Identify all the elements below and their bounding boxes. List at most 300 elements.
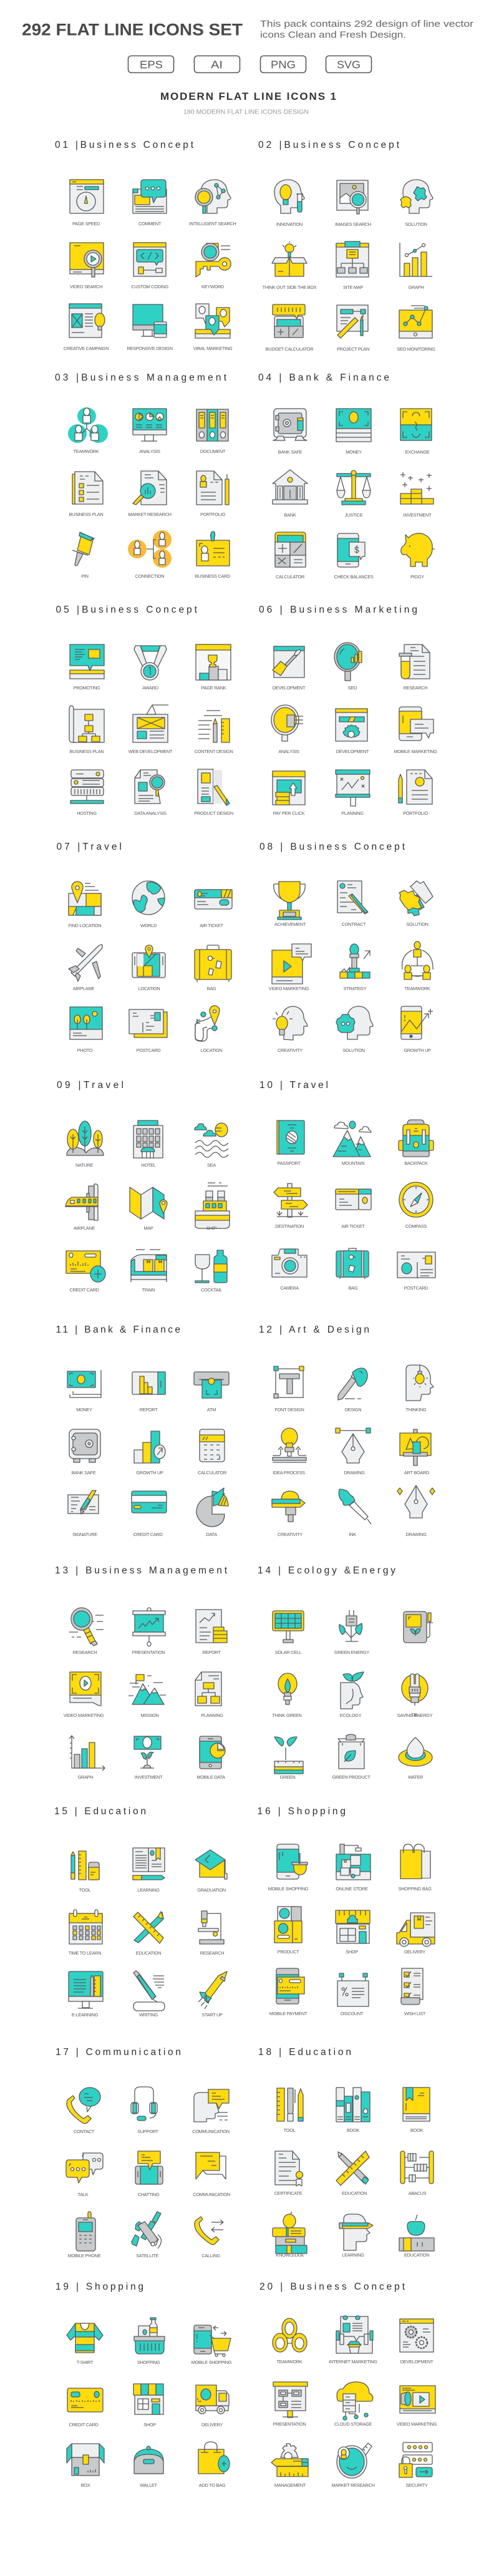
icon: web development	[133, 705, 168, 742]
label: OIL	[411, 1712, 419, 1718]
icon: content design	[198, 711, 230, 742]
icon: teamwork	[402, 941, 433, 979]
label: MOBILE MARKETING	[394, 749, 437, 754]
icon: development	[400, 2319, 434, 2352]
icon: page speed	[70, 180, 104, 213]
label: CONTRACT	[342, 921, 366, 927]
icon: mobile phone	[76, 2212, 95, 2251]
icon: postcard	[397, 1252, 435, 1278]
icon: ship	[195, 1183, 230, 1228]
icon: hosting	[70, 770, 104, 804]
label: TRAIN	[142, 1287, 155, 1293]
icon: justice	[337, 470, 371, 505]
label: TOOL	[79, 1887, 91, 1893]
icon: investment	[134, 1736, 161, 1768]
label: ATM	[207, 1407, 216, 1412]
icon: mobile payment	[276, 1968, 304, 2004]
label: IMAGES SEARCH	[335, 221, 371, 227]
label: RESEARCH	[404, 685, 427, 691]
heading 16: 16 | Shopping	[257, 1806, 346, 1817]
icon: think out side the box	[272, 241, 307, 276]
icon: communication	[194, 2089, 229, 2122]
panel: 19 Shopping	[56, 2282, 232, 2488]
label: GREEN ENERGY	[334, 1650, 369, 1655]
label: BACKPACK	[404, 1160, 428, 1166]
label: CREATIVE CAMPAIGN	[64, 346, 109, 351]
label: DEVELOPMENT	[336, 749, 369, 754]
label: MARKET RESEARCH	[128, 512, 172, 517]
label: SHOPPING BAG	[398, 1886, 432, 1892]
icon: calling	[195, 2217, 223, 2245]
label: DATA ANALYSIS	[134, 810, 167, 816]
icon: mountain	[333, 1121, 371, 1157]
icon: video marketing	[70, 1672, 101, 1706]
icon: mission	[128, 1674, 166, 1704]
icon: online store	[336, 1844, 371, 1880]
label: E-LEARNING	[72, 2012, 99, 2018]
icon: ink	[339, 1489, 371, 1524]
label: SHOPPING	[137, 2360, 160, 2365]
label: MOBILE PHONE	[68, 2253, 101, 2258]
label: CALLING	[201, 2253, 220, 2258]
sub caption: 180 MODERN FLAT LINE ICONS DESIGN	[183, 109, 309, 116]
icon: communication	[196, 2152, 226, 2179]
label: ABACUS	[409, 2190, 427, 2196]
icon: achievement	[274, 882, 305, 920]
label: CAMERA	[280, 1285, 299, 1291]
panel: 09 Travel	[57, 1080, 230, 1293]
icon: contact	[67, 2088, 100, 2124]
icon: innovation	[274, 180, 304, 213]
icon: shop	[133, 2384, 163, 2414]
label: TEAMWORK	[404, 986, 430, 991]
label: REPORT	[140, 1407, 158, 1412]
label: AIR TICKET	[200, 923, 224, 928]
heading 09: 09 |Travel	[57, 1080, 124, 1091]
label: EDUCATION	[342, 2190, 367, 2196]
icon: mobile shopping	[194, 2325, 231, 2356]
icon: development	[273, 646, 304, 678]
icon: nature	[67, 1121, 104, 1155]
panel: 01 Business Concept	[55, 140, 236, 351]
icon: money	[67, 1370, 101, 1397]
icon: pay per click	[273, 771, 305, 805]
icon: analysis	[133, 409, 167, 441]
icon: calculator	[200, 1429, 225, 1462]
icon: market research	[133, 471, 167, 505]
label: WALLET	[140, 2482, 158, 2488]
label: T-SHIRT	[77, 2360, 94, 2365]
label: INTELLIGENT SEARCH	[190, 221, 236, 226]
icon: bank	[273, 470, 308, 504]
label: PORTFOLIO	[200, 512, 225, 517]
icon: abacus	[400, 2151, 434, 2184]
header	[22, 19, 473, 116]
icon: support	[131, 2087, 157, 2121]
label: BUDGET CALCULATOR	[266, 346, 313, 352]
label: THINK OUT SIDE THE BOX	[263, 284, 317, 290]
icon: viral marketing	[195, 304, 230, 338]
label: SAVING ENERGY	[397, 1713, 433, 1718]
label: PIGGY	[410, 574, 424, 580]
label: DELIVERY	[404, 1949, 425, 1955]
label: ECOLOGY	[340, 1713, 362, 1718]
icon: project plan	[337, 305, 368, 338]
icon: check balances	[337, 533, 365, 567]
icon: thinking	[406, 1365, 434, 1401]
label: VIDEO MARKETING	[64, 1713, 104, 1718]
title: 292 FLAT LINE ICONS SET	[22, 20, 243, 39]
icon: design	[338, 1368, 367, 1400]
icon: market research	[337, 2443, 372, 2478]
label: CUSTOM CODING	[131, 284, 168, 289]
label: VIDEO MARKETING	[397, 2421, 437, 2427]
label: VIDEO MARKETING	[269, 986, 309, 991]
icon: certificate	[275, 2151, 303, 2186]
label: AWARD	[142, 685, 158, 691]
label: INK	[349, 1532, 356, 1537]
icon: solar cell	[273, 1611, 304, 1643]
label: THINK GREEN	[272, 1713, 302, 1718]
icon: idea process	[273, 1428, 306, 1462]
icon: t-shirt	[67, 2323, 103, 2353]
label: VIDEO SEARCH	[70, 284, 102, 289]
label: CHECK BALANCES	[334, 574, 374, 580]
label: DATA	[206, 1532, 217, 1537]
icon: creative campaign	[69, 304, 105, 338]
icon: creativity	[272, 1491, 305, 1522]
icon: money	[336, 409, 371, 442]
heading 11: 11 | Bank & Finance	[56, 1324, 180, 1335]
label: HOSTING	[77, 810, 97, 816]
label: COMMUNICATION	[193, 2192, 230, 2197]
heading 18: 18 | Education	[258, 2047, 351, 2058]
icon: report	[196, 1610, 227, 1643]
icon: bag	[336, 1248, 369, 1279]
label: CLOUD STORAGE	[334, 2421, 372, 2427]
label: GRAPH	[409, 284, 424, 290]
format badge: PNG: PNG	[271, 59, 296, 71]
icon: graduation	[195, 1850, 227, 1879]
icon: tool	[277, 2088, 303, 2121]
icon: passport	[277, 1120, 304, 1154]
label: STRATEGY	[344, 986, 367, 991]
icon: presentation	[133, 1608, 165, 1646]
icon: calculator	[275, 532, 306, 567]
label: SEO MONITORING	[397, 346, 435, 352]
label: MONEY	[76, 1407, 92, 1412]
icon: solution	[400, 180, 433, 213]
label: MARKET RESEARCH	[331, 2482, 375, 2488]
icon: piggy	[401, 533, 435, 566]
label: PAGE SPEED	[72, 221, 100, 226]
label: ADD TO BAG	[199, 2482, 226, 2488]
icon: atm	[194, 1372, 229, 1398]
label: PASSPORT	[277, 1160, 301, 1166]
label: REPORT	[203, 1650, 221, 1655]
label: GROWTH UP	[404, 1047, 431, 1053]
icon: bag	[195, 945, 231, 982]
icon: destination	[274, 1184, 308, 1217]
icon: education	[133, 1912, 163, 1943]
panel: 10 Travel	[259, 1080, 435, 1291]
icon: creativity	[273, 1006, 308, 1040]
icon: research	[399, 644, 430, 679]
panel: 20 Business Concept	[259, 2282, 437, 2488]
icon: discount	[337, 1973, 369, 2006]
icon: education	[336, 2151, 369, 2185]
label: WRITING	[139, 2012, 158, 2018]
icon: think green	[278, 1673, 297, 1704]
label: ART BOARD	[404, 1470, 429, 1475]
label: SOLUTION	[406, 921, 429, 927]
label: MOBILE DATA	[196, 1774, 225, 1780]
icon: chatting	[135, 2151, 163, 2184]
label: POSTCARD	[137, 1047, 160, 1053]
label: SOLUTION	[342, 1047, 365, 1053]
label: BAG	[207, 986, 216, 991]
label: MAP	[143, 1225, 153, 1231]
label: GRADUATION	[197, 1887, 226, 1893]
format badge: PNG	[261, 56, 306, 72]
label: MOBILE PAYMENT	[269, 2011, 308, 2016]
icon: check balances: $	[354, 545, 359, 555]
icon: investment	[400, 472, 434, 504]
icon: font design	[274, 1366, 304, 1398]
label: SEO	[348, 685, 357, 691]
heading 13: 13 | Business Management	[55, 1565, 228, 1576]
label: WEB DEVELOPMENT	[128, 749, 173, 754]
icon: credit card	[67, 2388, 103, 2412]
icon: solution	[336, 1006, 373, 1039]
label: CALCULATOR	[198, 1470, 226, 1475]
label: VIRAL MARKETING	[193, 346, 233, 351]
icon: award	[134, 646, 167, 680]
label: LEARNING	[137, 1887, 160, 1893]
label: PRODUCT DESIGN	[194, 810, 233, 816]
icon: compass	[399, 1182, 433, 1217]
icon: sea	[195, 1123, 228, 1157]
icon: graph	[400, 243, 432, 276]
label: BUSINESS PLAN	[70, 749, 104, 754]
icon: portfolio	[196, 471, 229, 505]
label: BAG	[349, 1285, 358, 1291]
icon: business plan	[69, 706, 104, 742]
label: PRODUCT	[278, 1949, 299, 1955]
icon: satellite	[132, 2212, 161, 2248]
icon: world	[132, 881, 165, 915]
label: PIN	[81, 573, 89, 579]
icon: location	[195, 1006, 220, 1041]
label: CREDIT CARD	[69, 1287, 99, 1293]
icon: tool	[71, 1851, 99, 1880]
icon: mobile shopping	[277, 1844, 308, 1879]
panel: 04 Bank & Finance	[258, 372, 435, 580]
icon: bank safe	[69, 1429, 100, 1462]
icon: security	[399, 2442, 432, 2477]
panel: 06 Business Marketing	[259, 605, 437, 816]
icon: learning	[339, 2214, 373, 2250]
label: JUSTICE	[345, 512, 363, 518]
icon: analysis	[271, 705, 303, 741]
label: NATURE	[75, 1162, 93, 1168]
icon: air ticket	[336, 1189, 371, 1210]
label: DEVELOPMENT	[273, 685, 306, 691]
icon: writing	[133, 1971, 165, 2011]
label: WISH LIST	[404, 2011, 426, 2016]
label: MOUNTAIN	[342, 1160, 364, 1166]
label: CREATIVITY	[278, 1532, 303, 1537]
icon: keyword	[196, 243, 231, 277]
label: ANALYSIS	[139, 449, 160, 454]
icon: solution	[399, 881, 433, 916]
label: PRESENTATION	[132, 1650, 165, 1655]
label: DOCUMENT	[200, 449, 226, 454]
icon: growth up	[401, 1006, 433, 1039]
icon: book	[403, 2088, 430, 2121]
label: KNOWLEDGE	[276, 2252, 304, 2258]
label: COMPASS	[405, 1223, 427, 1229]
label: START UP	[201, 2012, 223, 2018]
icon: video marketing	[400, 2386, 435, 2413]
label: INVESTMENT	[404, 512, 432, 518]
icon: location	[132, 945, 165, 978]
label: SEA	[207, 1162, 216, 1168]
label: LOCATION	[201, 1047, 222, 1053]
panel: 14 Ecology & Energy	[258, 1565, 433, 1780]
icon: drawing	[397, 1485, 435, 1518]
icon: pin	[72, 532, 94, 566]
icon: mobile marketing	[399, 707, 434, 741]
label: TIME TO LEARN	[69, 1950, 101, 1956]
icon: education	[399, 2215, 434, 2251]
icon: teamwork	[68, 407, 108, 443]
panel: 07 Travel	[56, 842, 232, 1053]
icon: development	[336, 709, 367, 741]
icon: product	[274, 1907, 302, 1943]
label: DISCOUNT	[341, 2011, 364, 2016]
heading 05: 05 |Business Concept	[56, 605, 198, 615]
icon: water	[399, 1738, 432, 1766]
icon: exchange	[400, 409, 432, 440]
icon: shopping bag	[400, 1844, 430, 1879]
label: WATER	[408, 1774, 423, 1780]
heading 07: 07 |Travel	[56, 842, 122, 852]
label: BUSINESS CARD	[195, 573, 230, 579]
subtitle: MODERN FLAT LINE ICONS 1	[160, 90, 336, 102]
icon: graph	[69, 1736, 105, 1771]
icon: book	[336, 2088, 370, 2122]
icon: connection	[128, 530, 172, 568]
icon: knowledge	[273, 2212, 307, 2253]
label: PAGE RANK	[201, 685, 226, 691]
icon: images search	[337, 180, 368, 214]
label: SIGNATURE	[72, 1532, 97, 1537]
panel: 17 Communication	[56, 2047, 230, 2258]
panel: 13 Business Management	[55, 1565, 228, 1780]
icon: page rank	[196, 644, 231, 680]
label: AIRPLANE	[74, 1225, 95, 1231]
icon: research	[198, 1911, 224, 1944]
icon: data analysis	[135, 770, 165, 804]
label: CONTENT DESIGN	[195, 749, 233, 754]
label: BOOK	[410, 2127, 423, 2133]
label: INVESTMENT	[135, 1774, 163, 1780]
label: INTERNET MARKETING	[329, 2359, 377, 2365]
label: EDUCATION	[404, 2252, 429, 2258]
label: RESEARCH	[73, 1650, 97, 1655]
icon: strategy	[340, 944, 370, 978]
icon: planning	[195, 1672, 221, 1706]
label: BOOK	[347, 2127, 359, 2133]
label: FIND LOCATION	[69, 923, 101, 928]
icon: bank safe	[273, 409, 307, 440]
label: DRAWING	[344, 1470, 365, 1475]
heading 03: 03 |Business Management	[55, 372, 227, 383]
icon: teamwork	[273, 2318, 307, 2352]
icon: delivery	[196, 2385, 229, 2414]
label: CREATIVITY	[278, 1047, 303, 1053]
panel: 03 Business Management	[55, 372, 230, 579]
label: SATELLITE	[136, 2253, 158, 2258]
label: SHOP	[143, 2422, 156, 2428]
icon: train	[131, 1250, 167, 1282]
label: SITE MAP	[343, 284, 363, 290]
label: DESTINATION	[275, 1223, 304, 1229]
icon: e-learning	[69, 1971, 103, 2008]
label: RESEARCH	[200, 1950, 224, 1956]
label: SOLUTION	[405, 221, 427, 227]
panel: 02 Business Concept	[258, 140, 435, 352]
label: ANALYSIS	[278, 749, 299, 754]
label: TALK	[78, 2192, 89, 2197]
icon: camera	[272, 1249, 307, 1277]
icon: promoting	[70, 644, 104, 679]
description: This pack contains 292 design of line vector	[260, 19, 473, 29]
format badge: AI	[195, 56, 240, 72]
label: RESPONSIVE DESIGN	[127, 346, 173, 351]
icon: mobile data	[200, 1736, 225, 1769]
label: TOOL	[284, 2127, 296, 2133]
label: LEARNING	[342, 2252, 364, 2258]
label: CALCULATOR	[276, 574, 304, 580]
format badge: EPS: EPS	[140, 59, 163, 71]
label: MOBILE SHOPPING	[191, 2360, 232, 2365]
icon: shopping	[134, 2318, 165, 2354]
icon: research	[69, 1608, 104, 1646]
icon: credit card	[66, 1251, 105, 1282]
icon: drawing	[336, 1428, 371, 1463]
icon: map	[130, 1187, 167, 1219]
label: CERTIFICATE	[274, 2190, 303, 2196]
icon: box	[67, 2444, 104, 2476]
icon: airplane	[65, 1184, 98, 1220]
label: DEVELOPMENT	[400, 2359, 434, 2365]
heading 20: 20 | Business Concept	[259, 2282, 405, 2292]
icon: shop	[336, 1910, 370, 1943]
icon: site map	[336, 241, 369, 277]
label: PLANNING	[201, 1713, 223, 1718]
label: EXCHANGE	[405, 449, 430, 455]
label: CONNECTION	[135, 573, 164, 579]
label: PAY PER CLICK	[273, 810, 305, 816]
label: WORLD	[140, 923, 157, 928]
heading 04: 04 | Bank & Finance	[258, 372, 389, 383]
panel: 08 Business Concept	[259, 842, 433, 1053]
icon: saving energy	[402, 1674, 428, 1706]
label: SECURITY	[406, 2482, 428, 2488]
label: ACHIEVEMENT	[274, 921, 306, 927]
